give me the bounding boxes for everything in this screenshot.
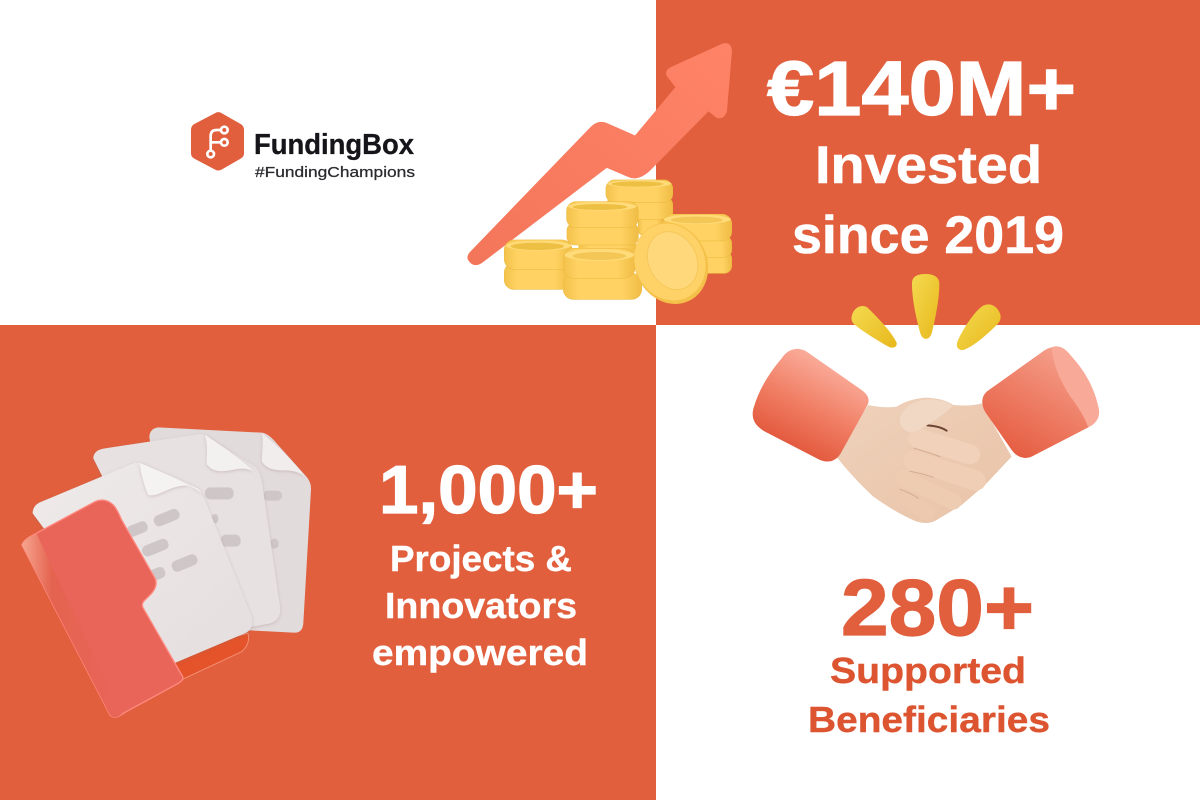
label line 1: Invested — [815, 136, 1042, 195]
fingers — [900, 438, 976, 513]
icon: handshake — [753, 274, 1099, 523]
panel: projects background — [0, 325, 656, 800]
label line 2: Innovators — [385, 585, 577, 626]
coin stack: left — [504, 240, 572, 289]
back document — [149, 427, 311, 633]
middle document — [93, 434, 280, 640]
headline figure: 280+ — [841, 563, 1034, 652]
stat: 280 beneficiaries — [808, 563, 1050, 740]
spark: right — [957, 304, 1001, 350]
icon: rising arrow and coins — [468, 44, 732, 317]
folder spine — [22, 534, 122, 717]
logo hashtag: #FundingChampions — [255, 164, 415, 181]
arrow — [468, 44, 731, 264]
cuff cap — [1052, 346, 1099, 427]
headline figure: 1,000+ — [379, 452, 598, 528]
leaning coin — [620, 210, 722, 317]
headline figure: €140M+ — [767, 46, 1076, 132]
finger shadows — [900, 448, 940, 498]
stat: 140M invested — [767, 46, 1076, 265]
label line 3: empowered — [372, 632, 588, 673]
label line 2: Beneficiaries — [808, 699, 1050, 740]
coin stack: front — [563, 248, 642, 299]
logo: FundingBox — [191, 112, 415, 181]
folder front — [22, 500, 183, 717]
cuff: right — [982, 347, 1099, 458]
coin stack: right — [663, 214, 732, 273]
spark: left — [851, 306, 897, 348]
icon: hexagon logo mark — [191, 112, 244, 170]
cuff: left — [753, 349, 869, 462]
logo wordmark: FundingBox — [254, 129, 414, 161]
label line 2: since 2019 — [792, 206, 1064, 265]
thumb — [900, 399, 953, 432]
label line 1: Projects & — [390, 538, 572, 579]
icon: folder with documents — [22, 427, 311, 717]
coin stack: back — [606, 180, 673, 235]
coin stack: middle — [567, 202, 638, 253]
dark gap — [927, 425, 947, 431]
spark: centre — [912, 274, 939, 339]
front document — [33, 463, 252, 665]
stat: 1,000 projects — [372, 452, 598, 673]
panel: invested background — [656, 0, 1200, 325]
label line 1: Supported — [830, 650, 1026, 691]
folder back — [93, 633, 249, 713]
hand base — [835, 398, 1012, 523]
